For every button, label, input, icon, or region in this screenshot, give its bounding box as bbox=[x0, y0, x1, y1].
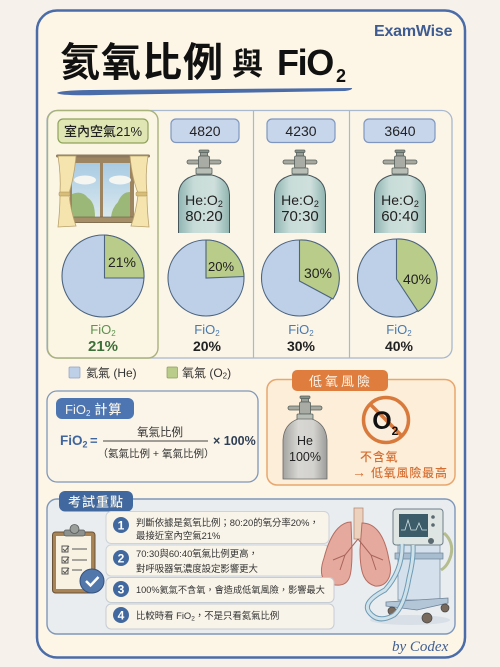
formula: = bbox=[90, 433, 98, 448]
FiO2 value: 30% bbox=[287, 322, 316, 354]
legend: 2 bbox=[223, 372, 228, 380]
formula: 氧氣比例 bbox=[137, 425, 183, 439]
point 1: 判斷依據是氦氧比例；80:20的氧分率20%， bbox=[136, 517, 319, 528]
FiO2 value: room air: 2 bbox=[111, 329, 116, 338]
FiO2 value: 30%: 30% bbox=[287, 338, 316, 354]
title: 氦氧比例 bbox=[60, 30, 224, 88]
point 2: 70:30與60:40氧氣比例更高， bbox=[136, 548, 258, 559]
formula: × 100% bbox=[213, 434, 256, 448]
column: 4230 bbox=[262, 119, 339, 354]
icon: window with curtains bbox=[56, 154, 150, 227]
pie chart: room air 21%: 21% bbox=[108, 254, 136, 270]
icon: helium cylinder bbox=[283, 396, 327, 479]
point 3: 100%氦氣不含氧，會造成低氧風險，影響最大 bbox=[136, 584, 325, 595]
icon: no oxygen: O bbox=[372, 407, 392, 435]
legend: ) bbox=[227, 366, 231, 380]
icon: cylinder 70:30: He:O bbox=[281, 192, 314, 208]
point 3 bbox=[106, 578, 334, 602]
icon: cylinder 60:40 bbox=[374, 150, 426, 233]
point 4: 4 bbox=[118, 608, 125, 622]
icon: cylinder 70:30 bbox=[274, 150, 326, 233]
point 2: 對呼吸器氧濃度設定影響更大 bbox=[136, 563, 258, 574]
FiO2 value: 20%: 2 bbox=[215, 329, 220, 338]
pie chart: room air 21% bbox=[62, 235, 144, 317]
label: room air bbox=[58, 119, 148, 143]
FiO2 value: 20%: 20% bbox=[193, 338, 222, 354]
badge: FiO2 calculation: 2 bbox=[86, 409, 91, 418]
FiO2 value: 30%: FiO bbox=[288, 322, 309, 337]
point 4 bbox=[106, 604, 334, 629]
FiO2 value: room air: FiO bbox=[90, 322, 111, 337]
panel: hypoxia risk bbox=[267, 370, 455, 485]
formula bbox=[60, 425, 256, 460]
icon: cylinder 60:40: 60:40 bbox=[381, 208, 419, 225]
icon: cylinder 70:30: 70:30 bbox=[281, 208, 319, 225]
label: 3640: 3640 bbox=[384, 123, 416, 139]
panel: exam points bbox=[47, 491, 455, 634]
warning text: → 低氧風險最高 bbox=[352, 464, 448, 480]
icon: cylinder 80:20 bbox=[178, 150, 230, 233]
badge: hypoxia risk bbox=[292, 370, 388, 391]
point 2 bbox=[106, 545, 329, 576]
brand: ExamWise: ExamWise bbox=[374, 23, 453, 40]
icon: helium cylinder: 100% bbox=[289, 450, 321, 464]
icon: cylinder 60:40: He:O bbox=[381, 192, 414, 208]
badge: exam points: 考試重點 bbox=[68, 494, 124, 510]
label: 4820: 4820 bbox=[189, 123, 221, 139]
point 2: 2 bbox=[118, 552, 125, 566]
label: 4820 bbox=[171, 119, 239, 142]
FiO2 value: 40% bbox=[385, 322, 414, 354]
legend: 氧氣 (O bbox=[182, 366, 223, 380]
pie chart: 30%: 30% bbox=[304, 265, 332, 281]
pie chart: 40%: 40% bbox=[403, 271, 431, 287]
FiO2 value: room air bbox=[88, 322, 118, 355]
badge: FiO2 calculation: 計算 bbox=[94, 402, 122, 417]
badge: FiO2 calculation bbox=[56, 398, 134, 419]
label: 4230 bbox=[267, 119, 335, 142]
icon: no oxygen bbox=[364, 398, 408, 442]
warning text: 不含氧 bbox=[360, 449, 398, 464]
point 4: 2 bbox=[191, 616, 195, 622]
badge: hypoxia risk: 低氧風險 bbox=[309, 374, 373, 389]
point 4: 比較時看 FiO bbox=[136, 610, 191, 621]
legend bbox=[69, 365, 231, 380]
column: 4820 bbox=[168, 119, 244, 354]
icon: cylinder 80:20: 80:20 bbox=[185, 208, 223, 225]
column: room air bbox=[48, 110, 158, 358]
FiO2 value: room air: 21% bbox=[88, 338, 118, 355]
signature: by Codex: by Codex bbox=[392, 639, 449, 655]
warning text bbox=[352, 449, 448, 480]
pie chart: 30% bbox=[262, 240, 339, 316]
FiO2 value: 40%: FiO bbox=[386, 322, 407, 337]
title: 與 bbox=[232, 39, 263, 84]
FiO2 value: 40%: 2 bbox=[407, 329, 412, 338]
title: FiO bbox=[277, 42, 333, 83]
badge: FiO2 calculation: FiO bbox=[65, 402, 86, 417]
icon: cylinder 70:30: 2 bbox=[314, 199, 319, 209]
point 3: 3 bbox=[118, 582, 125, 596]
point 1: 1 bbox=[118, 518, 125, 532]
FiO2 value: 40%: 40% bbox=[385, 338, 414, 354]
title: 2 bbox=[336, 66, 346, 86]
label: 3640 bbox=[364, 119, 435, 142]
FiO2 value: 20% bbox=[193, 322, 222, 354]
illustration: ventilator bbox=[367, 509, 452, 625]
title bbox=[60, 30, 346, 88]
column: 3640 bbox=[358, 119, 437, 354]
formula: 2 bbox=[82, 440, 88, 450]
pie chart: 20%: 20% bbox=[208, 259, 234, 274]
panel: FiO2 calculation bbox=[47, 391, 258, 482]
label: 4230: 4230 bbox=[285, 123, 317, 139]
icon: helium cylinder: He bbox=[297, 434, 313, 448]
title underline bbox=[57, 88, 352, 95]
FiO2 value: 20%: FiO bbox=[194, 322, 215, 337]
icon: clipboard bbox=[52, 524, 104, 593]
label: room air: 室內空氣21% bbox=[64, 124, 142, 139]
badge: exam points bbox=[59, 491, 133, 512]
formula: （氦氣比例 + 氧氣比例） bbox=[98, 447, 214, 460]
icon: cylinder 80:20: He:O bbox=[185, 192, 218, 208]
icon: cylinder 60:40: 2 bbox=[414, 199, 419, 209]
pie chart: 40% bbox=[358, 239, 437, 317]
panel: ratio comparison bbox=[47, 110, 452, 358]
FiO2 value: 30%: 2 bbox=[309, 329, 314, 338]
icon: no oxygen: 2 bbox=[392, 424, 399, 438]
illustration: lungs bbox=[321, 508, 390, 586]
icon: cylinder 80:20: 2 bbox=[218, 199, 223, 209]
formula: FiO bbox=[60, 433, 82, 448]
point 4: ，不是只看氦氣比例 bbox=[195, 610, 279, 621]
point 1: 最接近室內空氣21% bbox=[136, 530, 220, 541]
pie chart: 20% bbox=[168, 240, 244, 316]
point 1 bbox=[106, 512, 329, 544]
legend: 氦氣 (He) bbox=[86, 365, 137, 380]
